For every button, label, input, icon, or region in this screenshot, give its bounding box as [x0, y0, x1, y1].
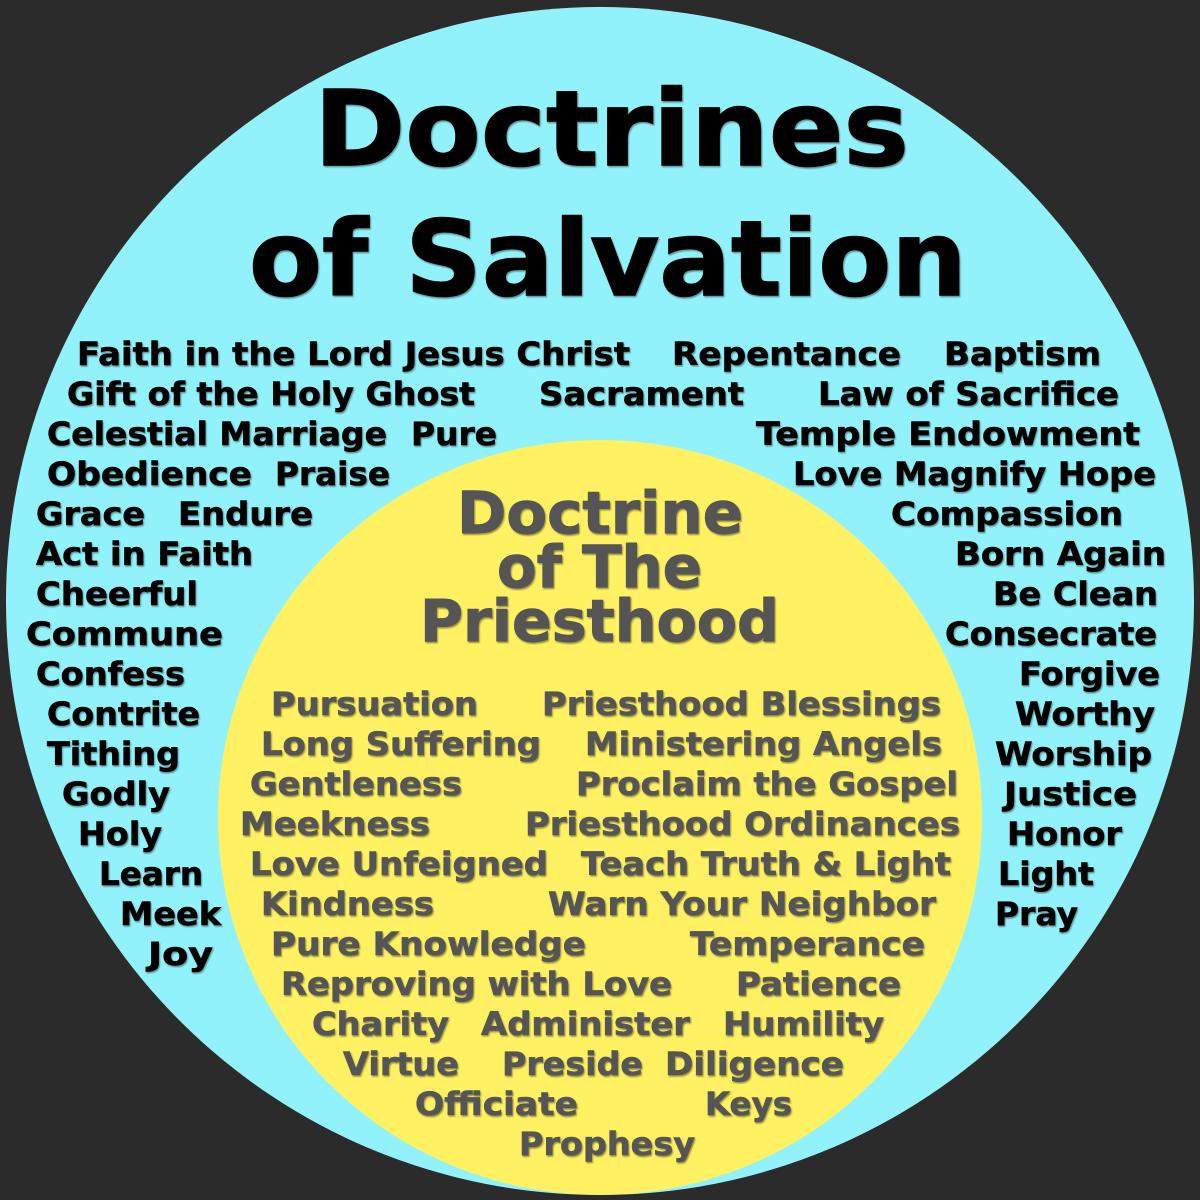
- outer word list: Baptism: [944, 335, 1101, 373]
- outer word list: Praise: [275, 455, 390, 493]
- inner word list: Gentleness: [250, 765, 462, 803]
- title: Doctrines of Salvation: [249, 68, 967, 320]
- outer word list: [26, 335, 1166, 973]
- inner word list: Kindness: [261, 885, 434, 923]
- outer word list: Tithing: [47, 735, 180, 773]
- outer word list: Love Magnify Hope: [793, 455, 1156, 493]
- inner word list: Diligence: [665, 1045, 844, 1083]
- outer word list: Worship: [995, 735, 1152, 773]
- heading: Doctrine of The Priesthood: of The: [497, 533, 702, 601]
- outer word list: Justice: [1002, 775, 1137, 813]
- inner word list: Administer: [481, 1005, 690, 1043]
- inner word list: Meekness: [240, 805, 430, 843]
- outer word list: Sacrament: [539, 375, 744, 413]
- inner word list: Priesthood Ordinances: [525, 805, 960, 843]
- outer word list: Faith in the Lord Jesus Christ: [77, 335, 630, 373]
- outer word list: Born Again: [955, 535, 1166, 573]
- outer word list: Act in Faith: [36, 535, 253, 573]
- inner word list: Preside: [502, 1045, 643, 1083]
- outer word list: Law of Sacrifice: [818, 375, 1119, 413]
- outer word list: Meek: [120, 895, 222, 933]
- inner circle: Doctrine of The Priesthood: [218, 440, 982, 1195]
- title: Doctrines of Salvation: Doctrines: [314, 68, 909, 190]
- outer word list: Be Clean: [993, 575, 1158, 613]
- inner word list: Teach Truth & Light: [581, 845, 951, 883]
- inner word list: Priesthood Blessings: [542, 685, 941, 723]
- outer word list: Pray: [995, 895, 1078, 933]
- outer word list: Grace: [36, 495, 145, 533]
- heading: Doctrine of The Priesthood: [420, 479, 779, 655]
- inner word list: Reproving with Love: [281, 965, 672, 1003]
- outer word list: Gift of the Holy Ghost: [67, 375, 475, 413]
- outer word list: Consecrate: [945, 615, 1157, 653]
- inner word list: Temperance: [690, 925, 925, 963]
- inner word list: Virtue: [343, 1045, 459, 1083]
- inner word list: Long Suffering: [261, 725, 541, 763]
- inner word list: [240, 685, 960, 1163]
- inner word list: Warn Your Neighbor: [548, 885, 936, 923]
- outer word list: Commune: [26, 615, 223, 653]
- outer word list: Godly: [62, 775, 170, 813]
- outer word list: Worthy: [1015, 695, 1155, 733]
- outer word list: Forgive: [1019, 655, 1160, 693]
- outer word list: Cheerful: [36, 575, 198, 613]
- inner word list: Officiate: [415, 1085, 578, 1123]
- inner word list: Love Unfeigned: [250, 845, 548, 883]
- outer word list: Obedience: [47, 455, 252, 493]
- outer word list: Light: [998, 855, 1094, 893]
- inner word list: Prophesy: [519, 1125, 695, 1163]
- inner word list: Pursuation: [271, 685, 478, 723]
- outer word list: Holy: [78, 815, 162, 853]
- outer word list: Endure: [178, 495, 313, 533]
- outer word list: Temple Endowment: [756, 415, 1140, 453]
- heading: Doctrine of The Priesthood: Doctrine: [457, 479, 743, 547]
- outer word list: Compassion: [891, 495, 1123, 533]
- outer word list: Celestial Marriage: [47, 415, 387, 453]
- outer word list: Repentance: [672, 335, 901, 373]
- title: Doctrines of Salvation: of Salvation: [249, 198, 967, 320]
- outer word list: Confess: [36, 655, 185, 693]
- outer word list: Joy: [146, 935, 213, 973]
- outer word list: Contrite: [47, 695, 200, 733]
- inner word list: Ministering Angels: [585, 725, 942, 763]
- outer word list: Honor: [1007, 815, 1122, 853]
- outer word list: Pure: [411, 415, 497, 453]
- inner word list: Humility: [723, 1005, 884, 1043]
- inner word list: Patience: [736, 965, 901, 1003]
- inner word list: Keys: [705, 1085, 792, 1123]
- inner word list: Proclaim the Gospel: [576, 765, 958, 803]
- heading: Doctrine of The Priesthood: Priesthood: [420, 587, 779, 655]
- inner word list: Charity: [312, 1005, 449, 1043]
- inner word list: Pure Knowledge: [271, 925, 586, 963]
- outer word list: Learn: [99, 855, 203, 893]
